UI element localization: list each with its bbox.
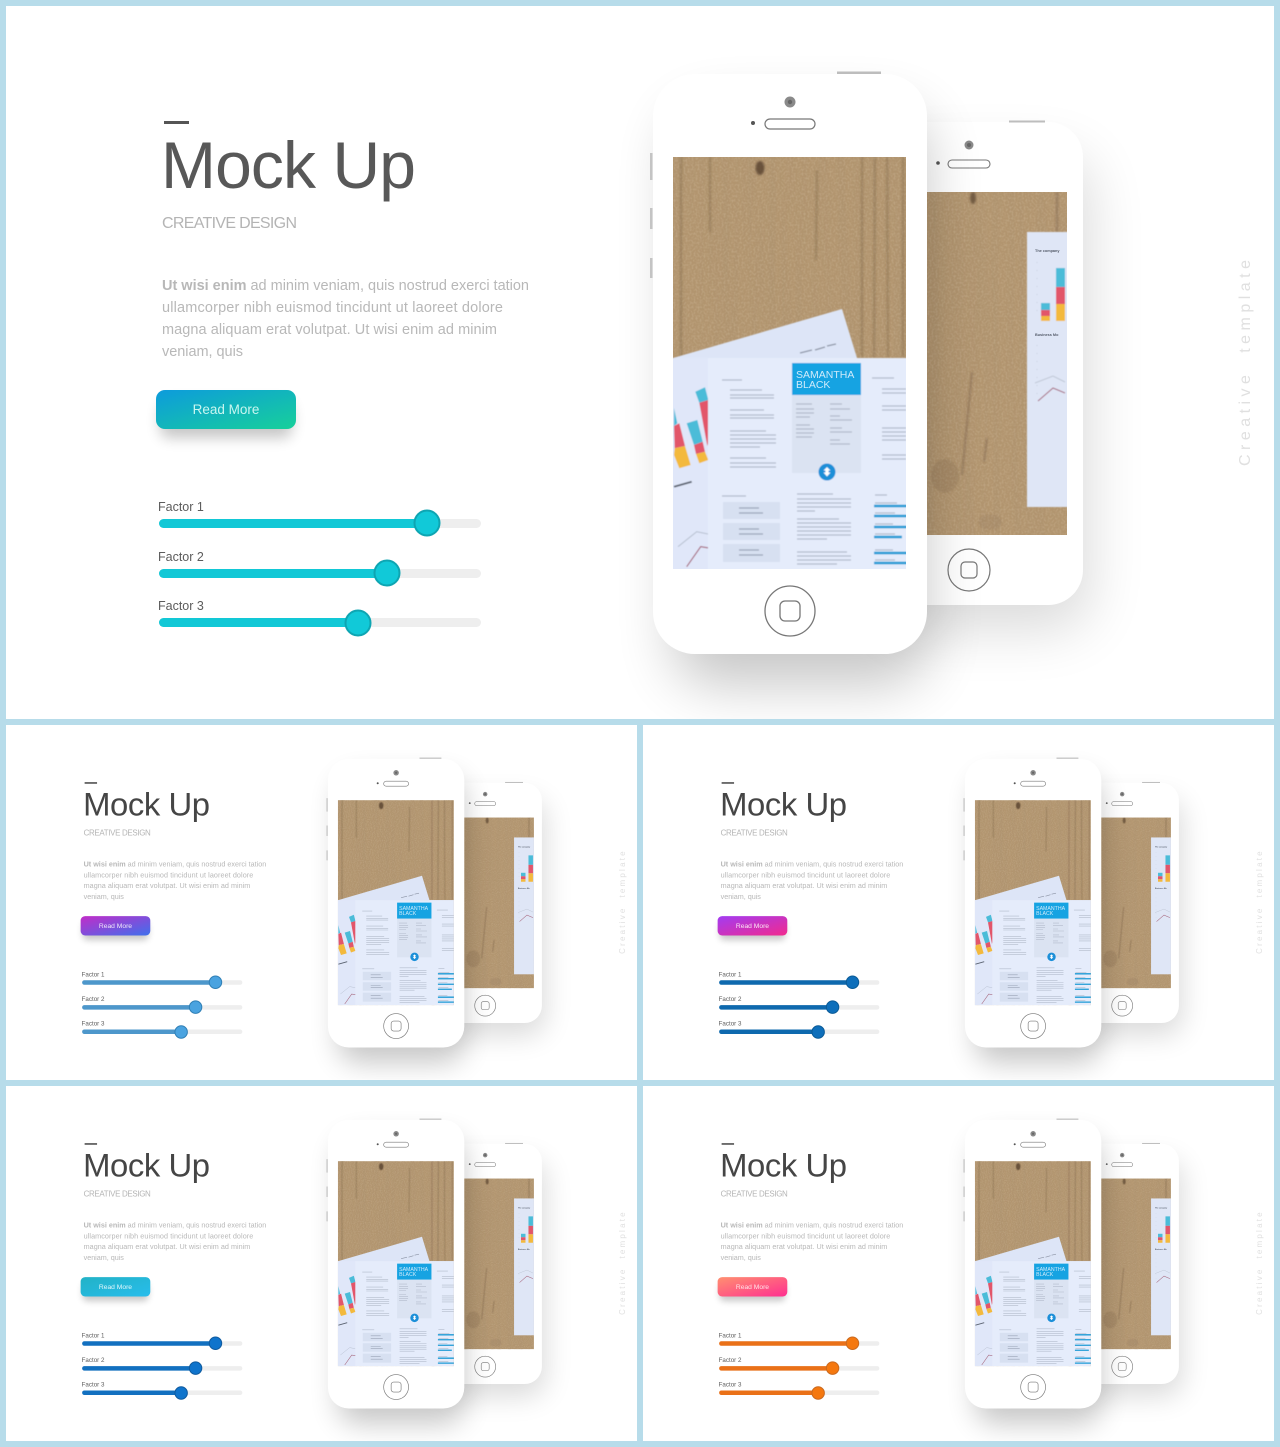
slider: factor 1: Factor 1 [719,1332,742,1339]
resume name on phone screen: BLACK [1036,911,1054,917]
vertical caption: Creative template [1237,260,1254,466]
button: read more: Read More [193,402,259,417]
body text: veniam, quis [721,1253,761,1262]
resume name on phone screen: BLACK [399,1272,417,1278]
slider: factor 2: Factor 2 [719,1357,742,1364]
resume name on phone screen: SAMANTHA [399,906,428,912]
slider: factor 3: Factor 3 [82,1021,105,1028]
slider: factor 3 [82,1382,242,1399]
phone mockups [326,1119,545,1424]
slider: factor 1: Factor 1 [82,971,105,978]
body text [84,859,266,901]
panel: small slide, magenta button [643,725,1274,1080]
panel: main slide, teal [6,6,1274,719]
body text [162,278,529,360]
chart labels on back phone: The company [1035,249,1059,253]
chart labels on back phone: The company [1155,1207,1167,1209]
slider: factor 3 [719,1021,879,1038]
resume name on phone screen: SAMANTHA [399,1267,428,1273]
resume name on phone screen: SAMANTHA [1036,1267,1065,1273]
chart labels on back phone: Business Mo [1155,888,1167,890]
phone mockups [650,72,1090,685]
slider: factor 1 [82,971,242,988]
body text: Ut wisi enim ad minim veniam, quis nostrud exerci tation [162,278,529,294]
slide content: cyan and blue [81,1119,627,1424]
button: read more [718,916,787,940]
subtitle: CREATIVE DESIGN [721,828,788,837]
slider: factor 2: Factor 2 [82,1357,105,1364]
slider: factor 2 [719,996,879,1013]
resume name on phone screen: SAMANTHA [796,369,854,381]
subtitle: CREATIVE DESIGN [84,828,151,837]
resume name on phone screen: BLACK [1036,1272,1054,1278]
panel: small slide, cyan button [6,1086,637,1441]
subtitle: CREATIVE DESIGN [84,1189,151,1198]
chart labels on back phone: Business Mo [518,1249,530,1251]
chart labels on back phone: The company [518,1207,530,1209]
body text: veniam, quis [162,344,243,360]
slide content: purple and light blue [81,758,627,1063]
slider: factor 1 [719,971,879,988]
phone mockups [963,1119,1182,1424]
slider: factor 3: Factor 3 [158,599,204,613]
vertical caption: Creative template [618,851,627,954]
slider: factor 1: Factor 1 [719,971,742,978]
resume name on phone screen: BLACK [796,379,830,391]
heading accent dash [85,1143,97,1145]
vertical caption: Creative template [1255,1212,1264,1315]
slider: factor 3 [158,599,481,636]
panel: small slide, purple button [6,725,637,1080]
chart labels on back phone: Business Mo [1035,333,1059,337]
body text: veniam, quis [721,892,761,901]
button: read more [718,1277,787,1301]
subtitle: CREATIVE DESIGN [162,215,297,232]
phone mockups [326,758,545,1063]
body text [84,1220,266,1262]
button: read more [81,1277,150,1301]
body text: Ut wisi enim ad minim veniam, quis nostrud exerci tation [721,1220,903,1229]
slide content: magenta and dark blue [718,758,1264,1063]
body text: ullamcorper nibh euismod tincidunt ut laoreet dolore [84,870,253,879]
slider: factor 3: Factor 3 [719,1021,742,1028]
title: Mock Up [720,786,847,823]
button: read more: Read More [99,923,132,930]
body text: Ut wisi enim ad minim veniam, quis nostrud exerci tation [721,859,903,868]
body text: Ut wisi enim ad minim veniam, quis nostrud exerci tation [84,859,266,868]
body text [721,1220,903,1262]
chart labels on back phone: The company [518,846,530,848]
heading accent dash [722,782,734,784]
chart labels on back phone: The company [1155,846,1167,848]
body text: ullamcorper nibh euismod tincidunt ut laoreet dolore [721,870,890,879]
heading accent dash [85,782,97,784]
button: read more: Read More [736,1284,769,1291]
body text: veniam, quis [84,892,124,901]
slider: factor 2 [82,996,242,1013]
chart labels on back phone: Business Mo [1155,1249,1167,1251]
slider: factor 1 [82,1332,242,1349]
slide content: coral and orange [718,1119,1264,1424]
body text [721,859,903,901]
body text: magna aliquam erat volutpat. Ut wisi enim ad minim [721,881,887,890]
heading accent dash [164,121,189,124]
body text: ullamcorper nibh euismod tincidunt ut laoreet dolore [84,1231,253,1240]
slider: factor 2 [719,1357,879,1374]
slider: factor 2 [82,1357,242,1374]
body text: magna aliquam erat volutpat. Ut wisi enim ad minim [84,881,250,890]
button: read more: Read More [99,1284,132,1291]
phone mockups [963,758,1182,1063]
title: Mock Up [161,128,416,202]
button: read more [156,390,296,438]
slider: factor 3: Factor 3 [719,1382,742,1389]
slider: factor 3: Factor 3 [82,1382,105,1389]
title: Mock Up [83,786,210,823]
slider: factor 2: Factor 2 [719,996,742,1003]
slider: factor 1 [719,1332,879,1349]
button: read more [81,916,150,940]
slider: factor 3 [719,1382,879,1399]
slider: factor 1: Factor 1 [82,1332,105,1339]
body text: magna aliquam erat volutpat. Ut wisi enim ad minim [162,322,497,338]
body text: veniam, quis [84,1253,124,1262]
title: Mock Up [83,1147,210,1184]
slider: factor 2: Factor 2 [158,550,204,564]
body text: ullamcorper nibh euismod tincidunt ut laoreet dolore [162,300,503,316]
body text: ullamcorper nibh euismod tincidunt ut laoreet dolore [721,1231,890,1240]
vertical caption: Creative template [618,1212,627,1315]
resume name on phone screen: BLACK [399,911,417,917]
body text: magna aliquam erat volutpat. Ut wisi enim ad minim [84,1242,250,1251]
body text: magna aliquam erat volutpat. Ut wisi enim ad minim [721,1242,887,1251]
slider: factor 1 [158,500,481,536]
slider: factor 2 [158,550,481,586]
chart labels on back phone: Business Mo [518,888,530,890]
slider: factor 3 [82,1021,242,1038]
title: Mock Up [720,1147,847,1184]
resume name on phone screen: SAMANTHA [1036,906,1065,912]
panel: small slide, coral button [643,1086,1274,1441]
body text: Ut wisi enim ad minim veniam, quis nostrud exerci tation [84,1220,266,1229]
heading accent dash [722,1143,734,1145]
slider: factor 1: Factor 1 [158,500,204,514]
slider: factor 2: Factor 2 [82,996,105,1003]
button: read more: Read More [736,923,769,930]
vertical caption: Creative template [1255,851,1264,954]
subtitle: CREATIVE DESIGN [721,1189,788,1198]
